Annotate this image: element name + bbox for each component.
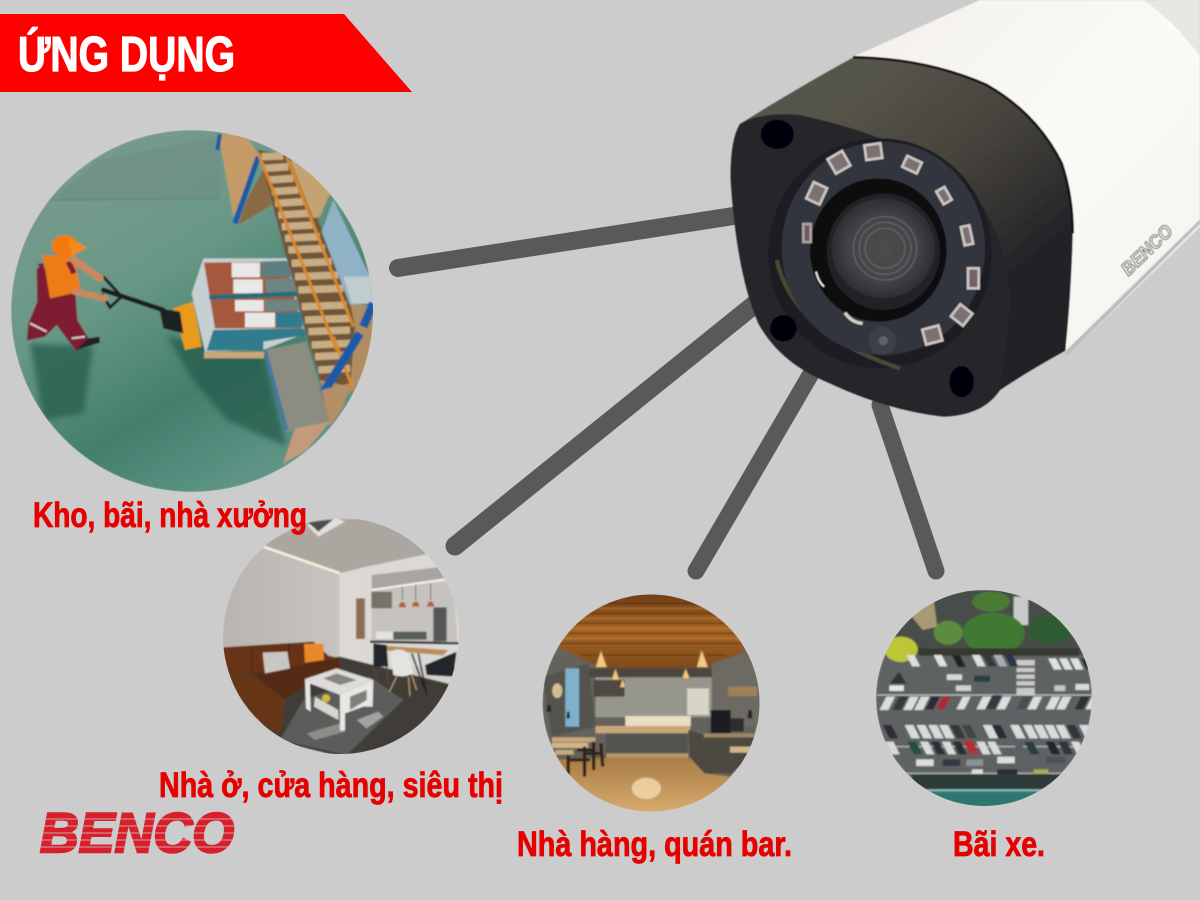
wall sconces [546,705,753,718]
connector line: warehouse [398,215,740,268]
cars row 1 [906,655,1095,670]
label: living room: Nhà ở, cửa hàng, siêu thị [159,766,503,805]
back wall [588,668,734,677]
right wall [712,647,763,727]
screw holes [761,120,974,397]
pallet truck [173,302,202,350]
front face [731,114,1010,417]
banner shape [0,14,412,92]
sofa [222,642,341,733]
light sensor [868,327,896,355]
right counter [688,730,755,773]
floor shadows [30,337,287,447]
cars row 4 [885,740,1085,754]
camera brand text: BENCO [1117,220,1177,280]
cushions [263,652,290,673]
wood mass [320,300,375,397]
restaurant wall base [542,647,757,778]
connector line: restaurant [696,372,812,571]
building roof [912,774,1065,790]
asphalt base [876,654,1092,778]
title banner [0,14,412,92]
ceiling [265,518,426,573]
floor [220,657,460,757]
display counter [625,716,691,726]
moving cars [947,674,962,680]
cars row 3 [883,725,1095,738]
camera body [853,0,1200,357]
lens barrel [810,178,947,322]
logo wordmark: BENCO [40,801,234,864]
kitchen [367,550,460,667]
infrared LEDs [803,143,979,345]
connector line: living room [455,300,760,546]
lot markings [877,695,1092,773]
floor [545,758,730,813]
dining set [373,645,448,655]
lens glass [832,198,935,298]
security camera [731,0,1200,417]
stacked pallets [258,150,355,387]
top road and trees [875,590,1094,655]
lower crate [265,342,330,432]
photo: restaurant [542,593,763,813]
camera hood [731,57,1073,417]
logo: BENCO [36,801,240,864]
LED ring [782,142,985,355]
left wall and window [543,663,595,737]
label: parking lot: Bãi xe. [953,825,1045,864]
room wall base [223,548,454,752]
label: warehouse: Kho, bãi, nhà xưởng [33,496,307,535]
banner heading: ỨNG DỤNG [18,27,235,82]
rug [280,677,403,755]
cars row 2 [880,695,1101,710]
wrapped boards [322,200,373,305]
shadow of building [890,672,906,683]
wood ceiling [552,593,748,668]
pallet load [192,258,305,352]
pendant lamps [595,649,708,687]
rack boxes [218,133,258,217]
cars row 5 [916,757,1065,774]
cabinets [339,567,367,667]
worker [27,235,105,351]
warehouse floor [11,130,373,492]
coffee table [305,668,373,731]
pendant lights [399,584,434,607]
photo: warehouse [11,130,375,492]
photo: parking lot [875,590,1101,811]
label: restaurant: Nhà hàng, quán bar. [517,825,792,864]
photo: living room [220,518,460,757]
tables and chairs [552,737,595,742]
connector line: parking [880,405,936,571]
